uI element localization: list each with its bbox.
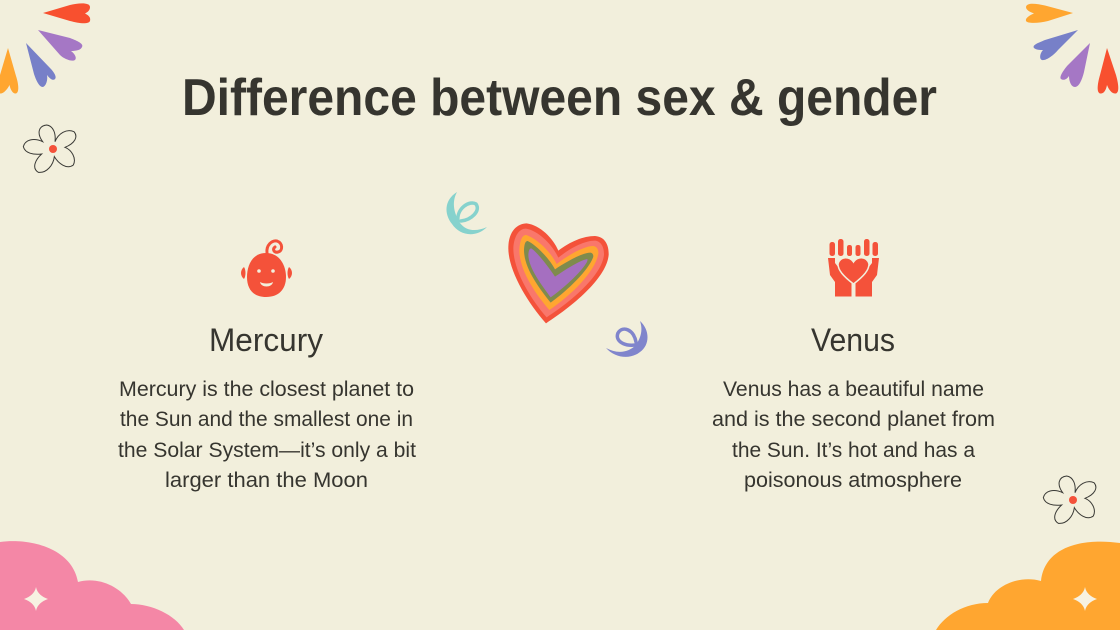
rainbow heart <box>508 223 609 323</box>
periwinkle ribbon swirl <box>606 321 648 357</box>
top-left petal burst <box>0 3 90 94</box>
text block: Mercury description <box>118 378 416 492</box>
heading: Mercury: Mercury <box>209 322 323 358</box>
text block: Mercury description: larger than the Moon <box>165 469 368 492</box>
top-right petal burst <box>1026 4 1118 94</box>
text block: Venus description <box>712 378 995 492</box>
text block: Venus description: and is the second planet from <box>712 408 995 431</box>
sparkle on pink cloud <box>24 587 48 611</box>
panel: Mercury <box>118 241 416 492</box>
sparkle on orange cloud <box>1073 587 1097 611</box>
title: Difference between sex & gender <box>182 69 937 127</box>
orange cloud bottom-right <box>936 542 1120 630</box>
flower bottom-right <box>1043 476 1096 523</box>
heading: Venus: Venus <box>811 322 895 358</box>
flower top-left <box>23 125 76 172</box>
icon: hands holding heart <box>828 239 879 296</box>
text block: Mercury description: the Solar System—it’s only a bit <box>118 439 416 462</box>
text block: Venus description: the Sun. It’s hot and has a <box>732 439 975 462</box>
pink cloud bottom-left <box>0 541 184 630</box>
panel: Venus <box>712 239 995 492</box>
text block: Mercury description: the Sun and the smallest one in <box>120 408 413 431</box>
text block: Venus description: poisonous atmosphere <box>744 469 962 492</box>
text block: Venus description: Venus has a beautiful name <box>723 378 984 401</box>
text block: Mercury description: Mercury is the closest planet to <box>119 378 414 401</box>
icon: baby face <box>241 241 292 297</box>
teal ribbon swirl <box>447 192 487 234</box>
